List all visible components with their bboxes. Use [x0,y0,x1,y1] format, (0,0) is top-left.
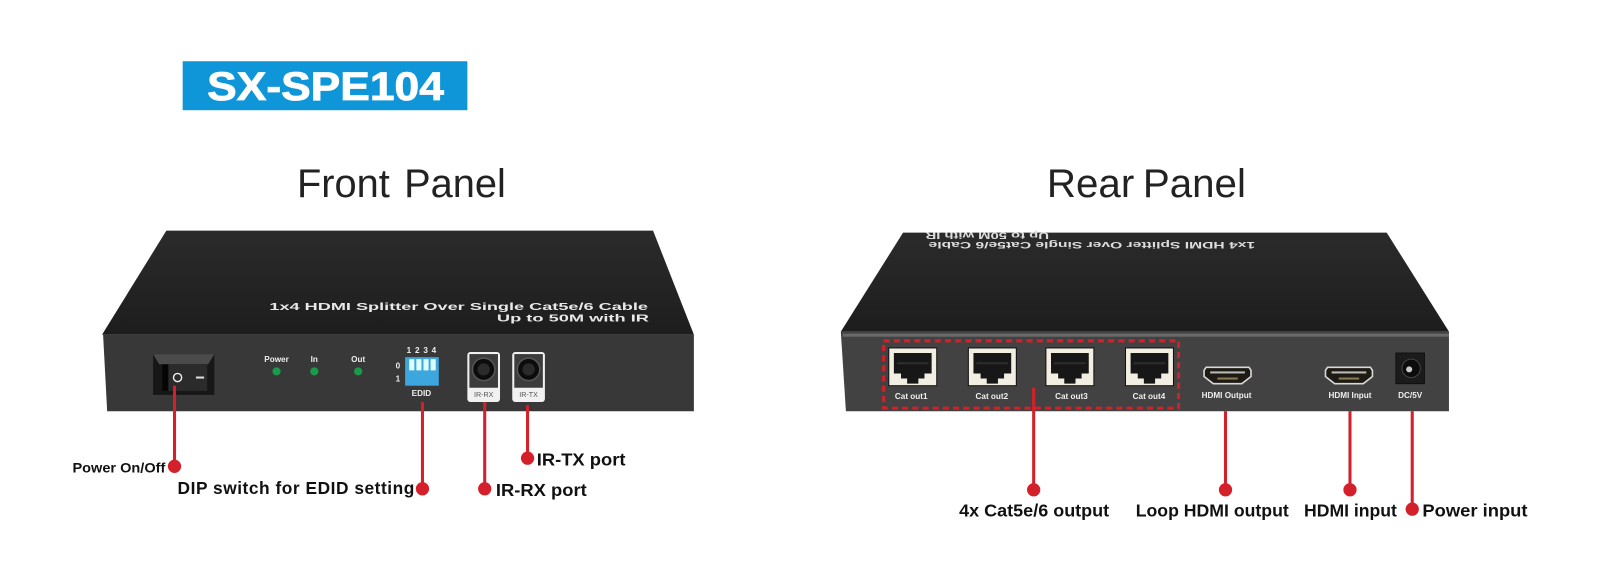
HDMI input [1325,367,1372,384]
panel: front device [102,231,694,411]
device rear face [841,332,1449,411]
RJ45 ports [889,348,1173,386]
callout labels: front: DIP switch for EDID setting [178,478,414,498]
LED indicators: Power [264,355,290,364]
printed product text: rear lid (upside down): 1x4 HDMI Splitter Over Single Cat5e/6 Cable [929,240,1255,250]
heading: front panel: Panel [404,162,506,206]
IR-RX port [467,352,500,402]
DC jack [1396,353,1424,384]
device lid: rear [841,233,1449,332]
DIP switch: 0 [396,361,401,370]
IR-RX port: IR-RX [474,391,494,399]
rear port labels: HDMI Output [1202,391,1252,400]
device lid: front [102,231,694,335]
power rocker switch [153,354,214,395]
rear port labels: Cat out3 [1055,392,1088,401]
LED indicators: Out [351,355,365,364]
printed product text: front lid [269,302,650,324]
callout labels: front: IR-RX port [496,480,587,500]
DIP switch: 1234 [407,346,437,355]
callout labels: rear: Power input [1422,500,1528,520]
title badge [183,61,467,110]
panel: rear device [841,231,1449,411]
callout labels: rear [959,500,1528,520]
rear port labels: Cat out2 [976,392,1009,401]
rear port labels [895,391,1423,401]
callout labels: front: IR-TX port [537,449,626,469]
callout labels: front [72,449,626,500]
IR-TX port: IR-TX [519,391,538,399]
IR-TX port [512,352,545,402]
callout labels: rear: 4x Cat5e/6 output [959,500,1109,520]
dashed highlight [884,341,1179,408]
callout labels: rear: Loop HDMI output [1136,500,1289,520]
printed product text: rear lid (upside down): Up to 50M with IR [925,231,1049,241]
heading: rear panel: Panel [1143,161,1246,206]
printed product text: front lid: 1x4 HDMI Splitter Over Single Cat5e/6 Cable [269,302,649,313]
printed product text: rear lid (upside down) [925,231,1255,250]
heading: rear panel: Rear [1047,161,1134,206]
callout labels: front: Power On/Off [72,460,166,476]
rear port labels: DC/5V [1398,391,1423,400]
title badge: SX-SPE104 [207,65,444,109]
heading: front panel: Front [297,162,390,206]
device front face [103,335,694,411]
rear port labels: HDMI Input [1328,391,1372,400]
callouts: front [168,386,534,495]
callout labels: rear: HDMI input [1304,500,1397,520]
DIP switch [396,346,439,398]
rear port labels: Cat out1 [895,392,928,401]
DIP switch: EDID [412,389,431,398]
callouts: rear [1027,388,1419,516]
LED indicators: In [311,355,318,364]
HDMI output [1204,367,1251,384]
printed product text: front lid: Up to 50M with IR [497,313,650,324]
DIP switch: 1 [396,375,401,384]
rear port labels: Cat out4 [1133,392,1166,401]
LED indicators [264,355,365,375]
